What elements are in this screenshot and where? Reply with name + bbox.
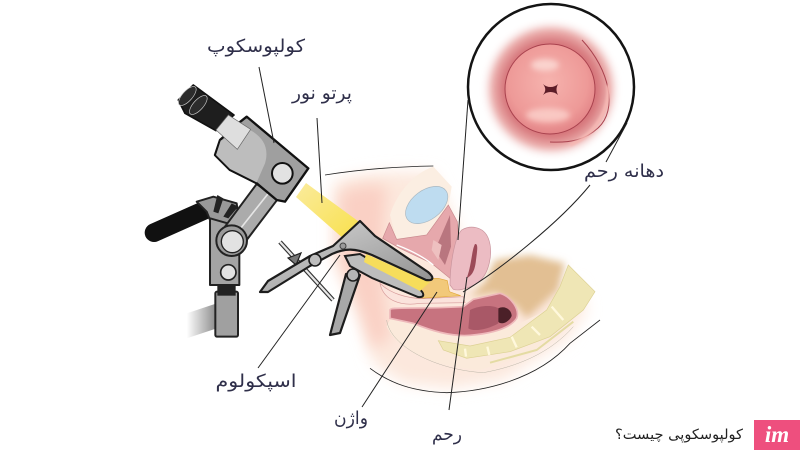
arm (220, 184, 278, 247)
leader line: uterus (449, 277, 467, 410)
leader line: colposcope (259, 67, 274, 143)
body soft tissue (333, 172, 587, 388)
speculum lower handle (330, 274, 360, 335)
rectum (390, 293, 517, 336)
head (215, 117, 308, 202)
pelvic anatomy illustration (325, 166, 600, 393)
light beam (296, 183, 362, 240)
eyepiece (178, 85, 234, 131)
outline (325, 166, 433, 175)
leader line: speculum (258, 255, 340, 368)
brown cavity (470, 255, 565, 318)
cervical opening (543, 84, 558, 95)
uterus (450, 227, 491, 290)
label: light beam: پرتو نور (291, 83, 352, 104)
leader line: inset right (606, 123, 627, 162)
logo (754, 420, 800, 450)
speculum (260, 221, 432, 335)
speculum rear arm and screw (280, 242, 333, 300)
leader line: light (317, 118, 322, 203)
label: vagina: واژن (334, 408, 368, 429)
leader line: vagina (362, 292, 437, 407)
cream lower body (387, 310, 570, 370)
base rod (187, 303, 217, 338)
sacrum (438, 265, 595, 358)
handle grip (154, 210, 205, 233)
yellow between blades (364, 254, 430, 291)
logo: im (765, 422, 789, 447)
label: colposcope: کولپوسکوپ (207, 36, 305, 57)
colposcope (154, 84, 308, 338)
lower pink wall (380, 283, 465, 304)
speculum upper blade and handle (260, 221, 432, 292)
fine contour (387, 320, 573, 373)
bladder (399, 179, 455, 231)
joint (216, 225, 247, 256)
leader line: inset left (458, 100, 468, 240)
leader line: cervix (463, 185, 590, 292)
vaginal canal yellow (420, 278, 461, 298)
vertical bracket (210, 218, 239, 285)
inset: cervix magnified circle (468, 4, 634, 170)
base column (215, 292, 238, 337)
label: speculum: اسپکولوم (216, 371, 296, 392)
speculum lower blade (345, 254, 423, 297)
footer title: کولپوسکوپی چیست؟ (615, 427, 743, 443)
anterior pink structure (383, 205, 459, 278)
label: cervix: دهانه رحم (584, 161, 664, 182)
cream pubic tissue (390, 167, 452, 240)
label: uterus: رحم (432, 424, 462, 445)
